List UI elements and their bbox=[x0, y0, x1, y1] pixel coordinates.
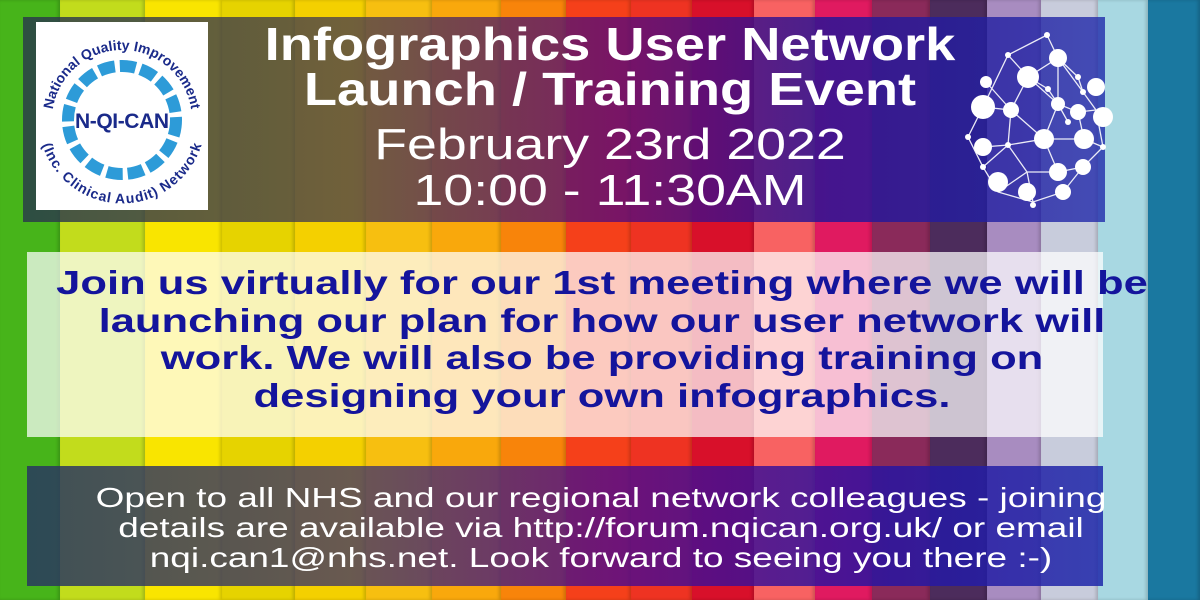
date and time: February 23rd 2022 bbox=[374, 120, 846, 169]
date and time: 10:00 - 11:30AM bbox=[414, 166, 806, 215]
footer text bbox=[96, 482, 1106, 573]
panel: header bbox=[23, 17, 1105, 222]
description text: designing your own infographics. bbox=[253, 376, 951, 414]
logo: National Quality Improvement bbox=[44, 40, 200, 110]
date and time bbox=[374, 120, 846, 215]
description text bbox=[56, 264, 1148, 414]
title bbox=[265, 18, 956, 115]
title: Infographics User Network bbox=[265, 18, 955, 70]
footer text: nqi.can1@nhs.net. Look forward to seeing you there :-) bbox=[150, 542, 1052, 573]
panel: footer bbox=[27, 466, 1103, 586]
description text: work. We will also be providing training on bbox=[161, 339, 1043, 376]
description text: Join us virtually for our 1st meeting where we will be bbox=[56, 264, 1148, 301]
logo: N-QI-CAN bbox=[75, 110, 169, 133]
description text: launching our plan for how our user network will bbox=[99, 302, 1105, 338]
title: Launch / Training Event bbox=[304, 63, 916, 115]
footer text: details are available via http://forum.nqican.org.uk/ or email bbox=[118, 512, 1084, 543]
footer text: Open to all NHS and our regional network colleagues - joining bbox=[96, 482, 1106, 513]
logo: (Inc. Clinical Audit) Network bbox=[40, 142, 202, 204]
logo bbox=[36, 22, 208, 210]
logo ring bbox=[68, 66, 176, 174]
icon: network globe bbox=[965, 32, 1113, 208]
panel: description bbox=[27, 252, 1103, 437]
